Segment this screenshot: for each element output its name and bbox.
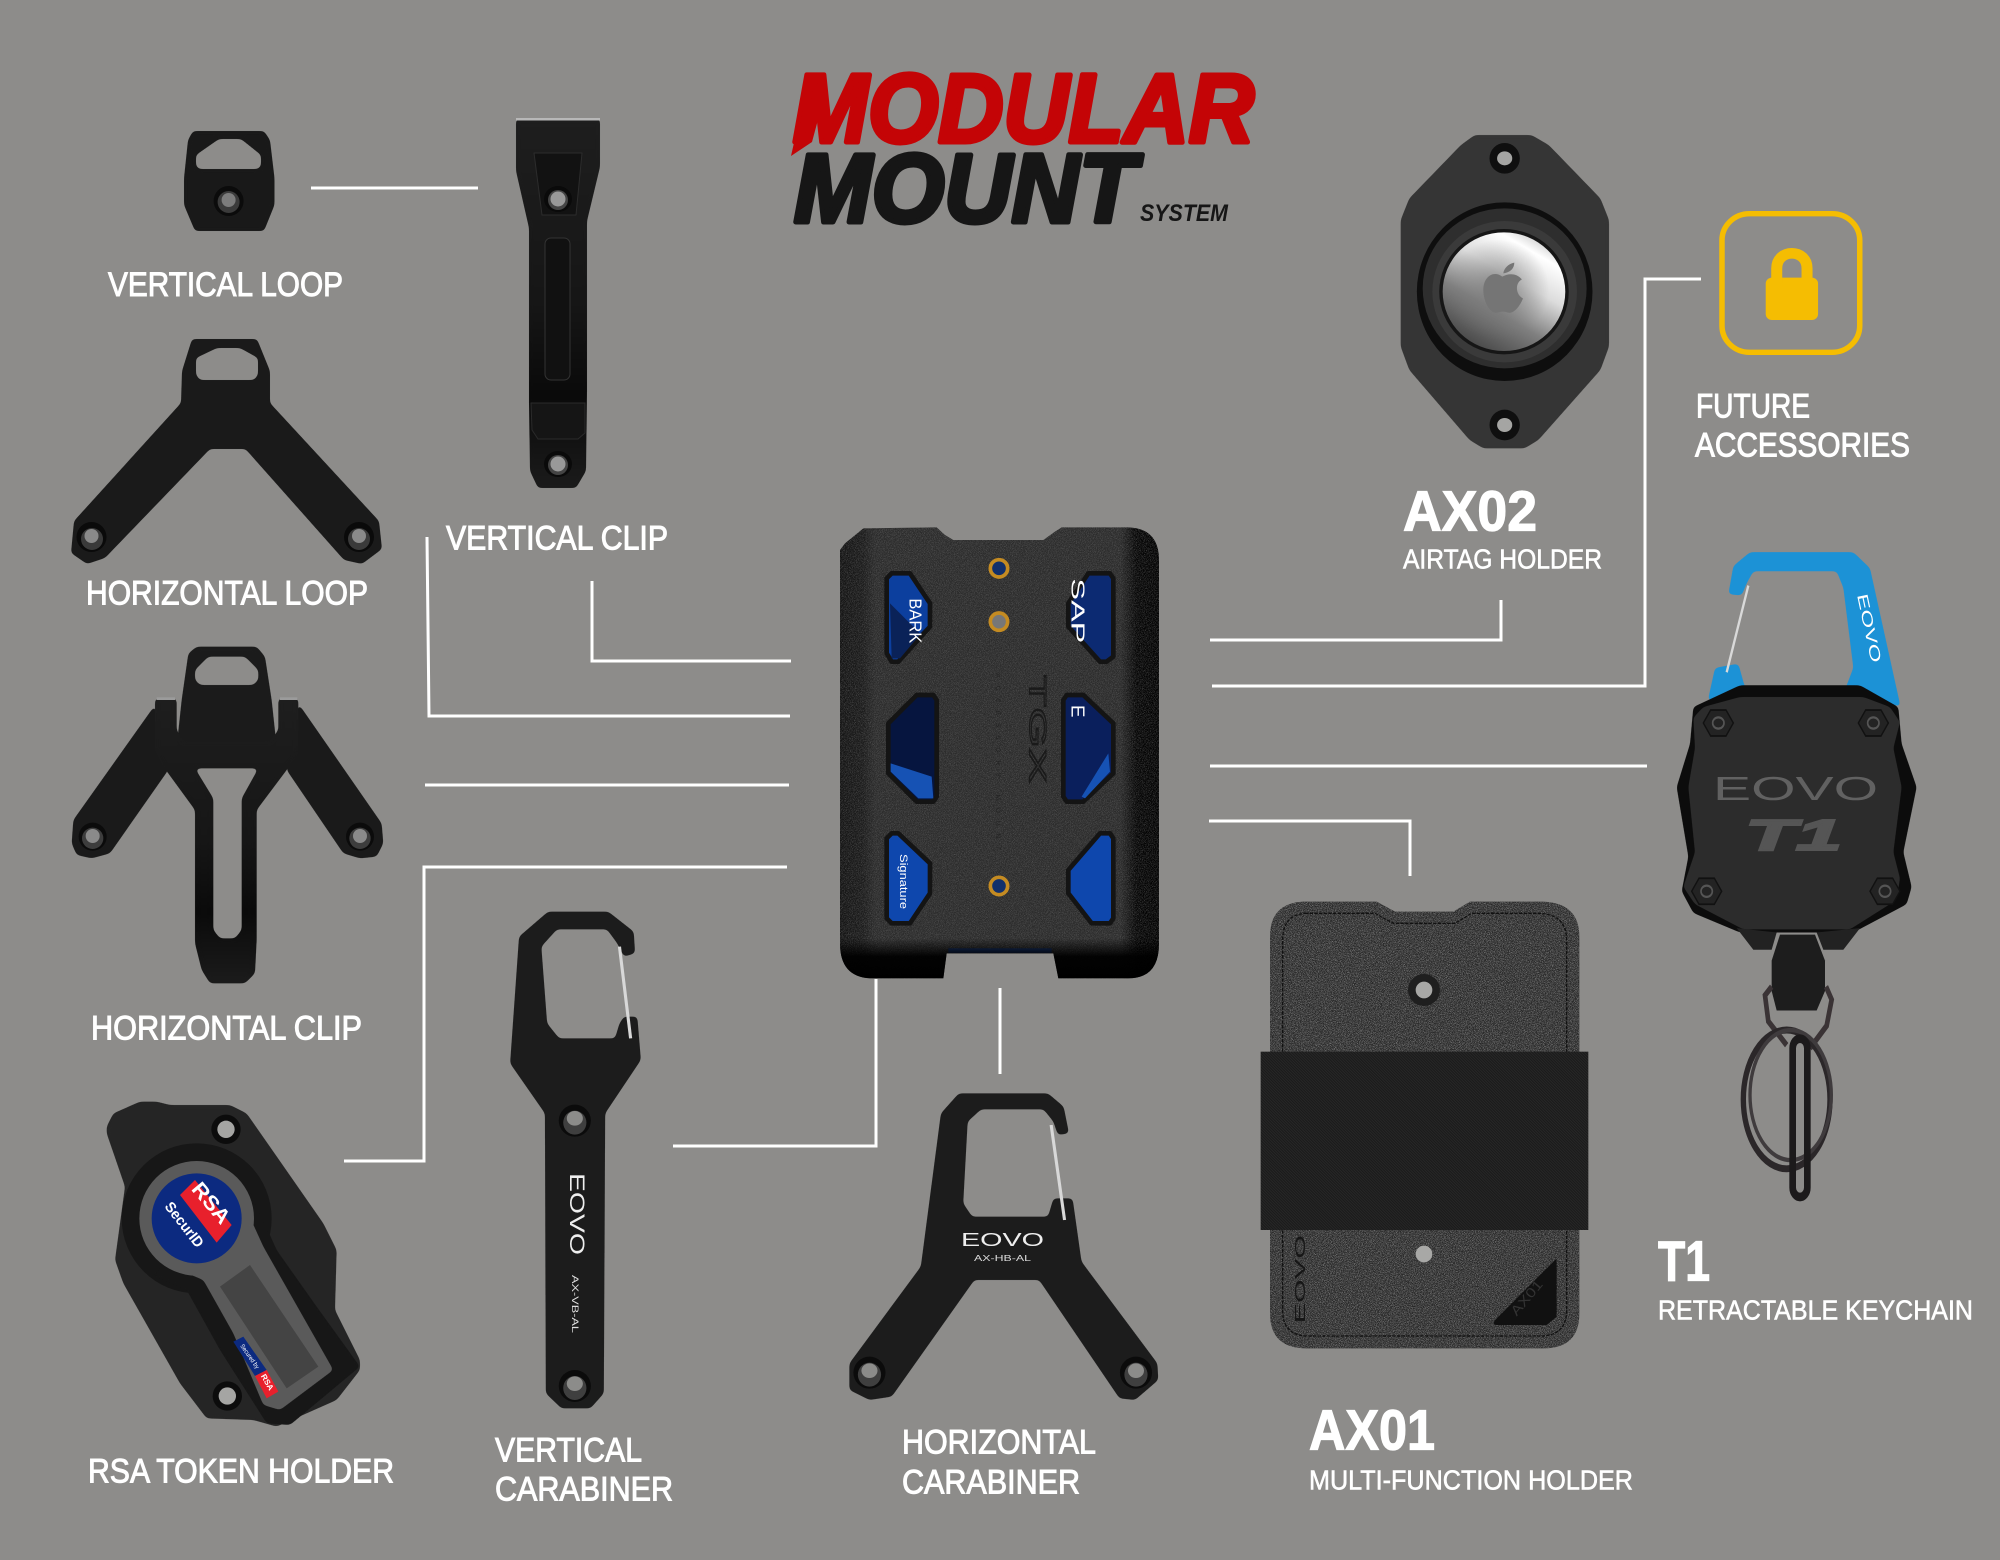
horizontal loop part bbox=[71, 339, 382, 564]
window: bottom left bbox=[887, 833, 930, 923]
secured by label bbox=[233, 1337, 278, 1398]
RSA token holder part bbox=[107, 1102, 360, 1427]
label: future accessories bbox=[1695, 388, 1910, 464]
swivel and rings bbox=[1743, 935, 1832, 1197]
carabiner brand mark: EOVO bbox=[1853, 592, 1884, 664]
elastic band bbox=[1261, 1052, 1588, 1230]
window: top right bbox=[1068, 573, 1113, 662]
horizontal clip part bbox=[72, 647, 383, 983]
carabiner brand mark: EOVO bbox=[961, 1230, 1044, 1250]
T1 retractable keychain part bbox=[1677, 552, 1917, 1197]
connector lines bbox=[311, 188, 1701, 1161]
title: Modular Mount System: SYSTEM bbox=[1140, 200, 1229, 227]
secured by label: RSA bbox=[259, 1372, 276, 1392]
label: horizontal carabiner: HORIZONTAL bbox=[902, 1424, 1096, 1462]
label: horizontal clip: HORIZONTAL CLIP bbox=[91, 1010, 362, 1048]
label: horizontal carabiner bbox=[902, 1424, 1096, 1502]
label: vertical loop: VERTICAL LOOP bbox=[108, 266, 343, 304]
label: AX02 airtag holder bbox=[1403, 480, 1602, 574]
label: RSA token holder: RSA TOKEN HOLDER bbox=[88, 1452, 394, 1490]
label: horizontal loop: HORIZONTAL LOOP bbox=[86, 574, 368, 612]
label: future accessories: ACCESSORIES bbox=[1695, 426, 1910, 464]
window: bottom left: Signature bbox=[897, 854, 909, 909]
window: top left: BARK bbox=[905, 598, 925, 644]
window: top right: SAP bbox=[1068, 578, 1089, 643]
corner tag bbox=[1494, 1258, 1557, 1325]
accessory mount caption: ACCESSORY MOUNT bbox=[994, 673, 1001, 850]
label: vertical carabiner: CARABINER bbox=[495, 1470, 673, 1508]
label: T1 retractable keychain: T1 bbox=[1658, 1230, 1710, 1294]
vertical clip part bbox=[516, 118, 600, 488]
token display bbox=[220, 1265, 318, 1388]
AX01 multi-function holder part bbox=[1261, 902, 1588, 1348]
icon: apple mark bbox=[1483, 263, 1523, 313]
title: Modular Mount System: MOUNT bbox=[794, 134, 1143, 243]
label: AX02 airtag holder: AX02 bbox=[1403, 480, 1537, 544]
label: AX01 multi-function holder bbox=[1309, 1398, 1633, 1496]
window: middle left bbox=[888, 695, 937, 802]
icon: future accessories lock bbox=[1722, 214, 1860, 352]
horizontal carabiner part bbox=[849, 1093, 1158, 1400]
central card holder bbox=[840, 527, 1159, 978]
RSA logo badge bbox=[180, 1178, 235, 1243]
gold rivets bbox=[990, 560, 1008, 895]
device brand mark: EOVO bbox=[1713, 770, 1878, 807]
window: middle right: E bbox=[1068, 705, 1089, 717]
label: AX01 multi-function holder: AX01 bbox=[1309, 1398, 1435, 1462]
label: AX02 airtag holder: AIRTAG HOLDER bbox=[1403, 544, 1602, 574]
embossed brand: EOVO bbox=[1293, 1235, 1309, 1323]
carabiner model code: AX-VB-AL bbox=[570, 1275, 580, 1333]
TGX logo: TGX bbox=[1023, 675, 1050, 783]
carabiner model code: AX-HB-AL bbox=[974, 1254, 1032, 1263]
AX02 airtag holder part bbox=[1401, 135, 1609, 448]
vertical loop part bbox=[184, 131, 274, 231]
window: bottom right bbox=[1068, 833, 1113, 923]
label: horizontal carabiner: CARABINER bbox=[902, 1464, 1080, 1502]
SecurID text: SecurID bbox=[161, 1199, 206, 1251]
secured by label: Secured by bbox=[238, 1343, 261, 1371]
window: top left bbox=[887, 573, 930, 662]
label: future accessories: FUTURE bbox=[1696, 388, 1810, 426]
device model mark: T1 bbox=[1745, 811, 1842, 860]
vertical carabiner part bbox=[510, 912, 641, 1408]
label: T1 retractable keychain bbox=[1658, 1230, 1973, 1326]
label: vertical carabiner bbox=[495, 1432, 673, 1508]
window: middle right bbox=[1063, 695, 1113, 802]
title: Modular Mount System bbox=[791, 54, 1254, 243]
label: AX01 multi-function holder: MULTI-FUNCTION HOLDER bbox=[1309, 1464, 1633, 1496]
label: vertical clip: VERTICAL CLIP bbox=[446, 520, 668, 558]
title: Modular Mount System: MODULAR bbox=[793, 54, 1254, 163]
blue carabiner bbox=[1708, 552, 1901, 707]
label: vertical carabiner: VERTICAL bbox=[495, 1432, 642, 1470]
RSA logo badge: RSA bbox=[187, 1178, 235, 1229]
corner tag: AX01 bbox=[1507, 1277, 1546, 1319]
carabiner brand mark: EOVO bbox=[565, 1173, 588, 1255]
